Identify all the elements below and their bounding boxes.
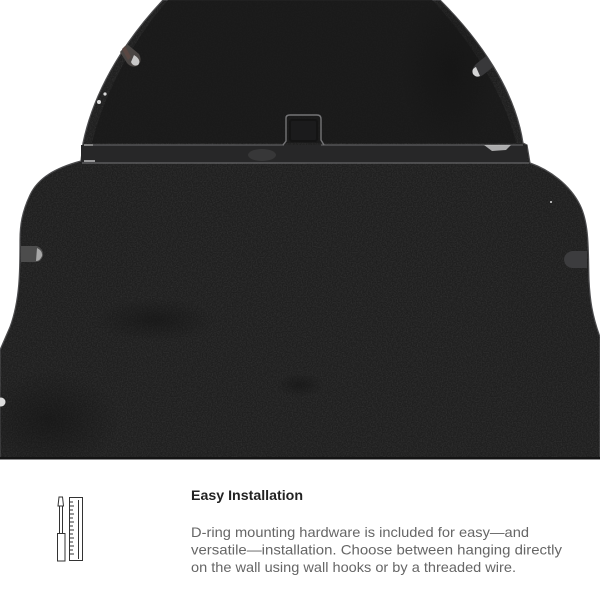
body text	[191, 524, 562, 575]
clip: upper right	[472, 56, 493, 77]
upper dome shading	[92, 0, 516, 143]
clip: left side	[21, 246, 43, 262]
heading: Easy Installation	[191, 487, 303, 503]
horizontal hanging bar	[81, 145, 529, 163]
clip: right side	[564, 251, 587, 268]
clip: upper left	[120, 44, 141, 67]
body text: D-ring mounting hardware is included for easy—and	[191, 524, 529, 540]
edge highlights	[0, 92, 552, 407]
icon: screwdriver	[58, 497, 65, 561]
mirror back panel	[0, 0, 600, 459]
icon: screwdriver and ruler	[58, 497, 82, 561]
photo: back of mirror	[0, 0, 600, 470]
body text: on the wall using wall hooks or by a threaded wire.	[191, 559, 516, 575]
icon: ruler	[70, 498, 82, 560]
body text: versatile—installation. Choose between hanging directly	[191, 542, 562, 558]
D-ring hanger	[283, 115, 324, 145]
